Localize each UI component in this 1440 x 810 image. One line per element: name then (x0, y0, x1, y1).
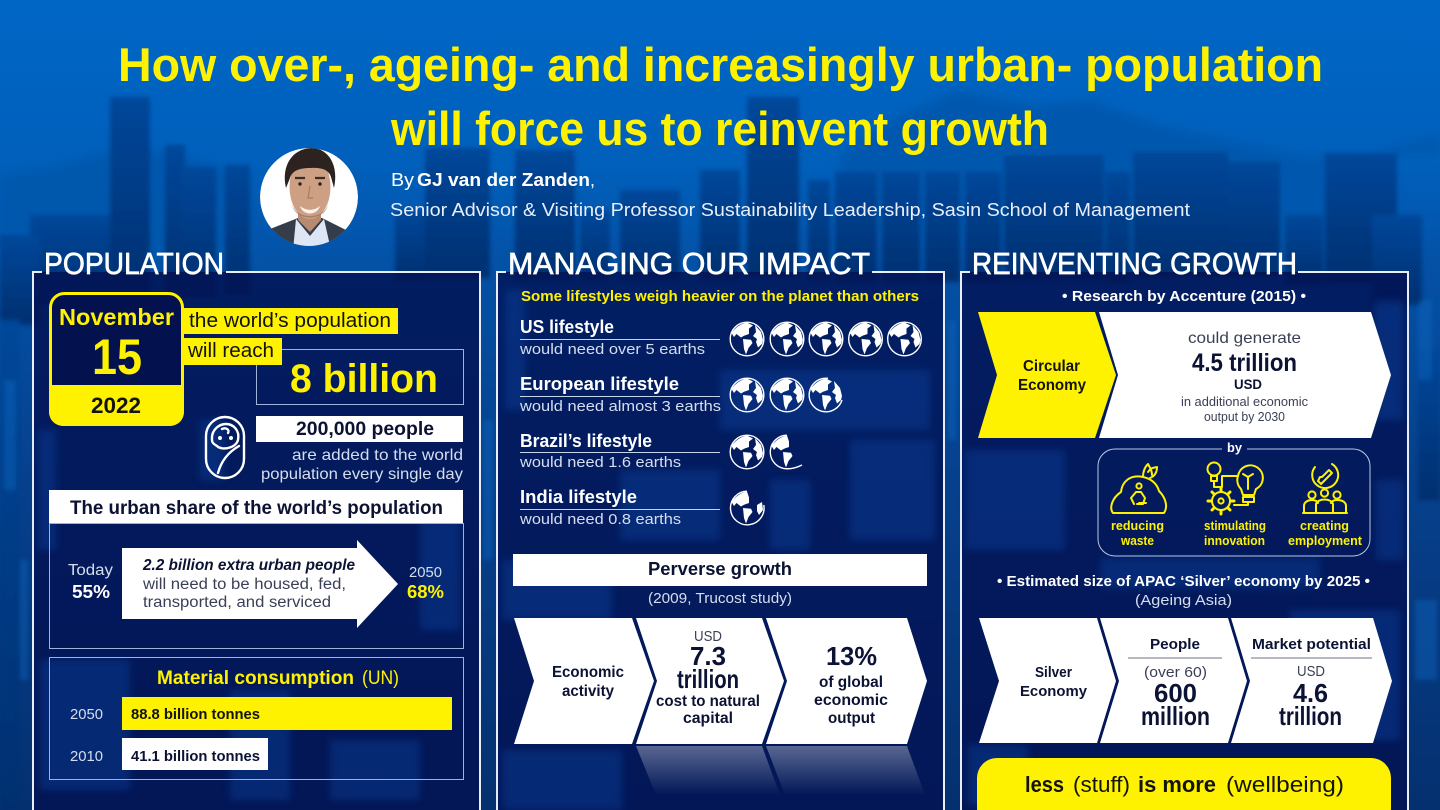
row: US lifestyle: would need over 5 earths (519, 341, 705, 358)
chevron: 4.5 trillion: 4.5 trillion (1192, 349, 1297, 377)
icon: stimulating innovation (1208, 462, 1263, 514)
callout: 200,000 people: population every single day (261, 466, 463, 483)
label: stimulating innovation: innovation (1204, 534, 1265, 548)
label: reducing waste (1111, 519, 1164, 548)
chevron: economic activity (514, 618, 654, 744)
chevron: 13 percent: output (828, 710, 875, 727)
bar 2010 (70, 738, 268, 770)
chevron: silver economy (979, 618, 1116, 743)
chevron: market potential: Market potential (1252, 637, 1371, 653)
row: European lifestyle: European lifestyle (520, 374, 679, 394)
row: European lifestyle: would need almost 3 earths (519, 398, 721, 415)
row: US lifestyle (519, 317, 921, 358)
label: stimulating innovation (1204, 519, 1266, 548)
label: creating employment (1288, 519, 1363, 548)
chevron: market potential (1231, 618, 1392, 743)
row: India lifestyle: would need 0.8 earths (519, 511, 681, 528)
bar 2010: 41.1 billion tonnes (131, 748, 260, 765)
panel texture: blurred city lights inside panels (38, 290, 1404, 810)
author photo (260, 148, 358, 250)
8 billion box: 8 billion (290, 357, 438, 401)
callout: less stuff is more wellbeing: is more (1138, 772, 1216, 797)
row: European lifestyle (519, 374, 842, 415)
label: creating employment: employment (1288, 534, 1363, 548)
icons: almost three earths (730, 378, 842, 412)
section: material consumption (50, 658, 464, 780)
chevron: 7.3 trillion (636, 618, 784, 744)
author credit: By (391, 170, 414, 190)
today figure (68, 562, 113, 602)
callout: 200,000 people (256, 416, 463, 483)
date badge (49, 294, 184, 426)
chevron: 7.3 trillion: USD (694, 628, 722, 645)
tag: will reach: will reach (187, 340, 274, 362)
chevron: 4.5 trillion: in additional economic (1181, 395, 1308, 409)
2050 figure: 2050 (409, 564, 442, 581)
label: stimulating innovation: stimulating (1204, 519, 1266, 533)
heading: population: POPULATION (44, 246, 224, 281)
box: by: by (1227, 440, 1243, 455)
chevron: circular economy: Circular (1023, 358, 1080, 375)
chevron: 7.3 trillion: trillion (677, 664, 739, 694)
banner: perverse growth: Perverse growth (648, 559, 792, 579)
row: Brazil's lifestyle: would need 1.6 earths (519, 454, 681, 471)
urban share heading: The urban share of the world’s population (70, 497, 443, 519)
reflection below chevrons (636, 746, 925, 795)
heading: reinventing growth: REINVENTING GROWTH (972, 246, 1297, 281)
chevron: 4.5 trillion: could generate (1188, 330, 1301, 347)
chevron: people (1100, 618, 1247, 743)
author credit: GJ van der Zanden (417, 170, 590, 190)
row: India lifestyle (519, 487, 764, 528)
subheading: silver economy (997, 574, 1370, 609)
chevron: circular economy (978, 312, 1116, 438)
chevron: 7.3 trillion: capital (683, 710, 733, 727)
subheading: lifestyles: Some lifestyles weigh heavier on the planet than others (521, 289, 919, 305)
subheading: Accenture: • Research by Accenture (2015) • (1062, 289, 1306, 305)
label: reducing waste: waste (1120, 534, 1154, 548)
chevron: 4.5 trillion (1099, 312, 1391, 438)
chevron: 4.5 trillion: USD (1234, 376, 1262, 392)
bar 2010: 2010 (70, 748, 103, 765)
section: urban share (49, 490, 464, 648)
panel: managing our impact (497, 272, 944, 810)
material heading: (UN) (362, 668, 399, 689)
icon: swaddled baby (206, 417, 244, 478)
tag: will reach (183, 338, 282, 365)
chevron: people: million (1141, 701, 1210, 731)
author credit: Senior Advisor & Visiting Professor Sustainability Leadership, Sasin School of Management (390, 200, 1190, 220)
arrow: extra urban people: transported, and serviced (143, 594, 331, 611)
bar 2050: 88.8 billion tonnes (131, 706, 260, 723)
title: How over-, ageing- and increasingly urban- population (118, 38, 1323, 91)
chevron: market potential: 4.6 (1293, 678, 1328, 708)
row: Brazil's lifestyle: Brazil’s lifestyle (520, 431, 652, 451)
8 billion box (256, 350, 464, 404)
chevron: economic activity: activity (562, 683, 614, 700)
callout: less stuff is more wellbeing: (wellbeing) (1226, 772, 1344, 797)
chevron: 7.3 trillion: cost to natural (656, 693, 760, 710)
bar 2050 (70, 697, 452, 730)
chevron: economic activity: Economic (552, 664, 624, 681)
label: creating employment: creating (1300, 519, 1349, 533)
panel: population (33, 272, 480, 810)
date badge: 15 (92, 329, 142, 385)
chevron: market potential: USD (1297, 663, 1325, 680)
callout: less stuff is more wellbeing: less (1025, 772, 1064, 797)
chevron: 13 percent: economic (814, 692, 888, 709)
callout: less stuff is more wellbeing: (stuff) (1073, 772, 1130, 797)
today figure: 55% (72, 582, 110, 602)
chevron: 13 percent (766, 618, 927, 744)
row: India lifestyle: India lifestyle (520, 487, 637, 507)
chevron: silver economy: Silver (1035, 664, 1072, 681)
2050 figure (407, 564, 444, 602)
title: will force us to reinvent growth (390, 102, 1049, 155)
heading: managing our impact: MANAGING OUR IMPACT (508, 246, 870, 281)
chevron: 4.5 trillion: output by 2030 (1204, 410, 1285, 424)
chevron: circular economy: Economy (1018, 377, 1086, 394)
date badge: November (59, 304, 174, 330)
author credit: , (590, 170, 595, 190)
lower gutter streaks (4, 300, 1437, 680)
material heading: Material consumption (157, 668, 354, 689)
bar 2050: 2050 (70, 706, 103, 723)
box: by (1098, 440, 1370, 556)
chevron: 7.3 trillion: 7.3 (690, 641, 726, 671)
chevron: silver economy: Economy (1020, 683, 1088, 700)
icon: reducing waste (1111, 464, 1166, 513)
arrow: extra urban people (122, 540, 398, 628)
subheading: silver economy: • Estimated size of APAC ‘Silver’ economy by 2025 • (997, 574, 1370, 590)
row: Brazil's lifestyle (519, 431, 802, 471)
icon: creating employment (1303, 464, 1347, 513)
callout: less stuff is more wellbeing (977, 758, 1391, 810)
callout: 200,000 people: are added to the world (292, 447, 463, 464)
tag: the world's population: the world’s population (189, 310, 391, 332)
source: Trucost: (2009, Trucost study) (648, 590, 792, 607)
chevron: people: People (1150, 636, 1200, 653)
title (118, 38, 1323, 155)
chevron: 13 percent: of global (819, 674, 883, 691)
row: US lifestyle: US lifestyle (520, 317, 614, 337)
chevron: people: (over 60) (1144, 664, 1207, 681)
icons: 1.6 earths (730, 435, 802, 469)
callout: 200,000 people: 200,000 people (296, 419, 434, 440)
2050 figure: 68% (407, 582, 444, 602)
author credit (390, 170, 1190, 220)
arrow: extra urban people: will need to be housed, fed, (142, 576, 346, 593)
label: reducing waste: reducing (1111, 519, 1164, 533)
today figure: Today (68, 562, 113, 579)
urban share heading (49, 490, 463, 523)
icons: five earths (730, 322, 921, 356)
chevron: market potential: trillion (1279, 701, 1342, 731)
chevron: 13 percent: 13% (826, 641, 877, 671)
date badge: 2022 (91, 393, 141, 418)
icon: 0.8 earth (730, 491, 764, 525)
banner: perverse growth (513, 554, 927, 586)
panel: reinventing growth (961, 272, 1408, 810)
arrow: extra urban people: 2.2 billion extra urban people (142, 557, 355, 574)
subheading: silver economy: (Ageing Asia) (1135, 592, 1232, 609)
chevron: people: 600 (1154, 678, 1197, 708)
